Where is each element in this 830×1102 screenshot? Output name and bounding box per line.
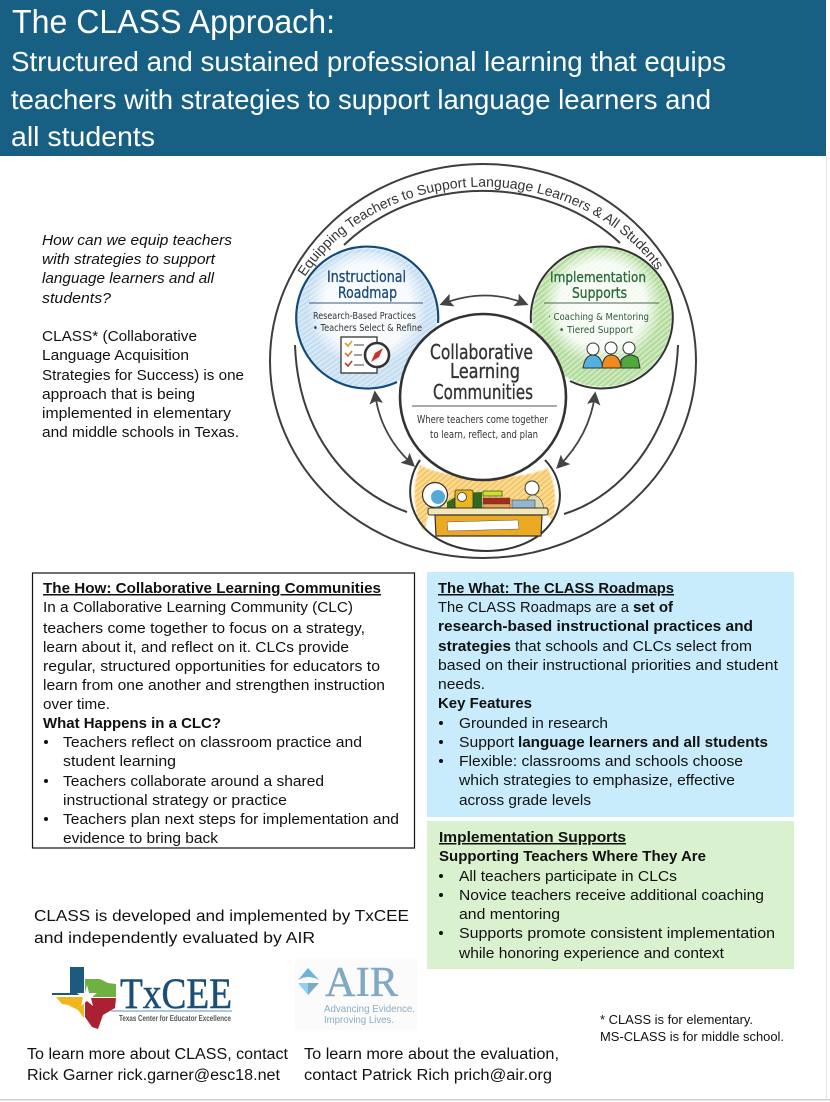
paragraph: what a CLC is	[43, 599, 385, 713]
contact: CLASS: To learn more about CLASS, contact	[27, 1046, 289, 1063]
footnote: * CLASS is for elementary.	[600, 1012, 753, 1027]
paragraph: what a CLC is: learn about it, and reflect on it. CLCs provide	[43, 639, 349, 656]
header banner	[0, 0, 826, 156]
circle: Instructional Roadmap: Instructional	[327, 267, 406, 286]
paragraph: roadmaps description: set of	[633, 599, 674, 616]
circle: Implementation Supports: Supports	[572, 284, 627, 302]
paragraph: roadmaps description: needs.	[438, 676, 485, 693]
paragraph: roadmaps description: The CLASS Roadmaps are a	[438, 599, 630, 616]
bullet list: Teachers collaborate around a shared	[63, 773, 324, 790]
circle: Collaborative Learning Communities: Communities	[433, 380, 533, 404]
title: The CLASS Approach:	[12, 3, 335, 40]
guiding question: with strategies to support	[42, 251, 216, 268]
CLASS description	[42, 328, 244, 441]
subtitle	[11, 46, 726, 152]
panel: The How	[32, 573, 414, 848]
bullet list: Teachers plan next steps for implementation and	[63, 811, 399, 828]
paragraph: roadmaps description	[438, 599, 779, 693]
circle: Collaborative Learning Communities: Collaborative	[430, 340, 533, 364]
paragraph: what a CLC is: learn from one another and strengthen instruction	[43, 677, 385, 694]
contact: CLASS	[27, 1046, 289, 1084]
subtitle: Structured and sustained professional learning that equips	[11, 46, 726, 77]
circle: Instructional Roadmap	[296, 247, 438, 389]
subtitle: teachers with strategies to support language learners and	[11, 84, 711, 115]
CLASS description: Language Acquisition	[42, 347, 189, 364]
logo: TxCEE	[52, 967, 232, 1029]
bullet list: and mentoring	[459, 906, 560, 923]
circle: Implementation Supports: • Tiered Support	[559, 325, 633, 336]
attribution text	[34, 908, 409, 947]
circle: bottom table scene	[410, 460, 560, 551]
contact: CLASS: Rick Garner rick.garner@esc18.net	[27, 1067, 281, 1084]
contact: evaluation: contact Patrick Rich prich@air.org	[304, 1067, 552, 1084]
contact: evaluation: To learn more about the evaluation,	[304, 1046, 559, 1063]
circle: Collaborative Learning Communities: Where teachers come together	[417, 414, 549, 426]
CLASS description: implemented in elementary	[42, 405, 232, 422]
attribution text: and independently evaluated by AIR	[34, 930, 315, 947]
logo: AIR	[295, 958, 417, 1030]
guiding question: language learners and all	[42, 270, 215, 287]
paragraph: what a CLC is: In a Collaborative Learning Community (CLC)	[43, 599, 353, 616]
bullet list: which strategies to emphasize, effective	[458, 772, 735, 789]
logo: TxCEE: Texas Center for Educator Excellence	[119, 1014, 231, 1023]
bullet list	[439, 715, 768, 809]
circle: Instructional Roadmap: Research-Based Practices	[313, 311, 416, 322]
CLASS description: approach that is being	[42, 386, 195, 403]
intro text block	[42, 232, 244, 441]
circle: Collaborative Learning Communities: Learning	[450, 359, 520, 383]
subheading: Supporting Teachers Where They Are	[439, 848, 706, 865]
outer ring	[270, 164, 696, 558]
circle: Implementation Supports: · Coaching & Mentoring	[548, 312, 649, 323]
subheading: What Happens: What Happens in a CLC?	[43, 715, 221, 732]
bullet list: Support	[459, 734, 515, 751]
bullet list: while honoring experience and context	[458, 945, 725, 962]
double arrow: roadmap to table	[375, 393, 413, 465]
paragraph: what a CLC is: teachers come together to focus on a strategy,	[43, 620, 365, 637]
circle: Collaborative Learning Communities: to learn, reflect, and plan	[430, 429, 538, 441]
footnote	[600, 1012, 784, 1044]
paragraph: roadmaps description: based on their instructional priorities and student	[438, 657, 779, 674]
bullet list	[439, 868, 775, 962]
circle: Collaborative Learning Communities	[400, 314, 566, 480]
heading: The How: The How: Collaborative Learning Communities	[43, 580, 381, 597]
bullet list: Supports promote consistent implementation	[459, 925, 775, 942]
footnote: MS-CLASS is for middle school.	[600, 1029, 784, 1044]
panel: Implementation Supports	[427, 821, 794, 969]
circle: Instructional Roadmap: • Teachers Select & Refine	[313, 323, 422, 334]
bullet list: instructional strategy or practice	[63, 792, 287, 809]
CLASS description: Strategies for Success) is one	[42, 367, 244, 384]
attribution text: CLASS is developed and implemented by TxCEE	[34, 908, 409, 925]
paragraph: roadmaps description: that schools and CLCs select from	[515, 638, 752, 655]
bullet list: Teachers reflect on classroom practice and	[63, 734, 362, 751]
double arrow: roadmap to supports	[442, 296, 526, 304]
bullet list: All teachers participate in CLCs	[459, 868, 677, 885]
bullet list: Novice teachers receive additional coaching	[459, 887, 764, 904]
guiding question: How can we equip teachers	[42, 232, 233, 249]
logo: TxCEE: TxCEE	[120, 971, 232, 1018]
paragraph: roadmaps description: research-based instructional practices and	[438, 618, 753, 635]
heading: Implementation Supports: Implementation Supports	[439, 829, 626, 846]
logo: AIR: AIR	[325, 960, 398, 1006]
circle: Instructional Roadmap: Roadmap	[338, 283, 397, 302]
CLASS description: and middle schools in Texas.	[42, 424, 239, 441]
circle: Implementation Supports	[531, 247, 673, 389]
logo: AIR: Advancing Evidence.	[324, 1003, 415, 1015]
paragraph: what a CLC is: over time.	[43, 696, 110, 713]
diagram: CLASS framework	[269, 163, 697, 559]
icon: checklist and compass	[341, 337, 389, 373]
ring caption: Equipping Teachers to Support Language Learners & All Students	[298, 177, 662, 276]
subtitle: all students	[11, 121, 155, 152]
logo: AIR: Improving Lives.	[324, 1014, 394, 1026]
paragraph: roadmaps description: strategies	[438, 638, 511, 655]
icon: collaborators around desk	[422, 481, 548, 536]
bullet list: across grade levels	[459, 792, 591, 809]
guiding question	[42, 232, 233, 307]
subheading: Key Features: Key Features	[438, 695, 532, 712]
circle: Implementation Supports: Implementation	[550, 270, 646, 286]
icon: three people	[583, 342, 640, 368]
guiding question: students?	[42, 290, 112, 307]
bullet list: student learning	[63, 753, 176, 770]
CLASS description: CLASS* (Collaborative	[42, 328, 197, 345]
bullet list: evidence to bring back	[63, 830, 219, 847]
bullet list	[44, 734, 399, 847]
paragraph: what a CLC is: regular, structured opportunities for educators to	[43, 658, 380, 675]
bullet list: Flexible: classrooms and schools choose	[459, 753, 743, 770]
contact: evaluation	[304, 1046, 559, 1084]
bullet list: language learners and all students	[518, 734, 768, 751]
bullet list: Grounded in research	[459, 715, 608, 732]
double arrow: supports to table	[558, 394, 595, 467]
panel: The What	[427, 572, 794, 817]
heading: The What: The What: The CLASS Roadmaps	[438, 580, 674, 597]
